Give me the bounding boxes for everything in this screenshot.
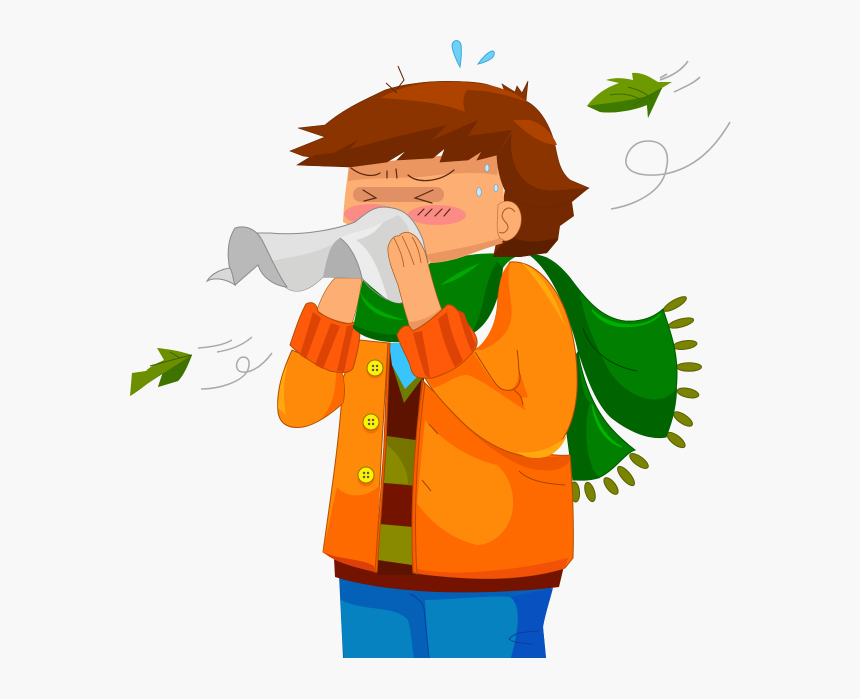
- right cuff: [397, 305, 477, 378]
- jacket: [323, 340, 573, 579]
- icon: top right leaf: [587, 73, 672, 118]
- chin shadow: [425, 238, 503, 263]
- scarf around neck: [353, 253, 520, 342]
- face: [343, 150, 521, 263]
- blush: [344, 204, 466, 225]
- hair back: [493, 130, 589, 257]
- wind lines top right: [611, 61, 730, 209]
- jeans: [339, 575, 553, 658]
- jacket right body: [412, 380, 573, 578]
- sweat drops: [477, 164, 498, 196]
- icon: bottom left leaf: [130, 348, 206, 396]
- left hand: [317, 278, 362, 324]
- shirt collar and tie: [389, 343, 424, 403]
- scarf tail with tassels: [530, 255, 702, 503]
- hair front: [290, 66, 589, 208]
- sweater hem: [334, 558, 564, 592]
- right sleeve: [425, 262, 577, 458]
- forehead shadow: [348, 150, 500, 181]
- tissue: [207, 207, 428, 303]
- icon: flying drops above head: [452, 40, 494, 67]
- left jacket panel: [323, 340, 388, 572]
- right hand: [388, 232, 443, 332]
- tassels: [570, 294, 702, 503]
- lower tail: [560, 352, 635, 480]
- left sleeve: [278, 350, 344, 427]
- buttons: [358, 360, 384, 486]
- eye band: [353, 187, 444, 202]
- sweater with stripes: [378, 343, 424, 575]
- eyes and brows: [351, 168, 454, 216]
- wind lines bottom left: [198, 337, 272, 389]
- left cuff: [290, 303, 360, 373]
- upper tail: [530, 255, 677, 438]
- ear: [497, 201, 521, 241]
